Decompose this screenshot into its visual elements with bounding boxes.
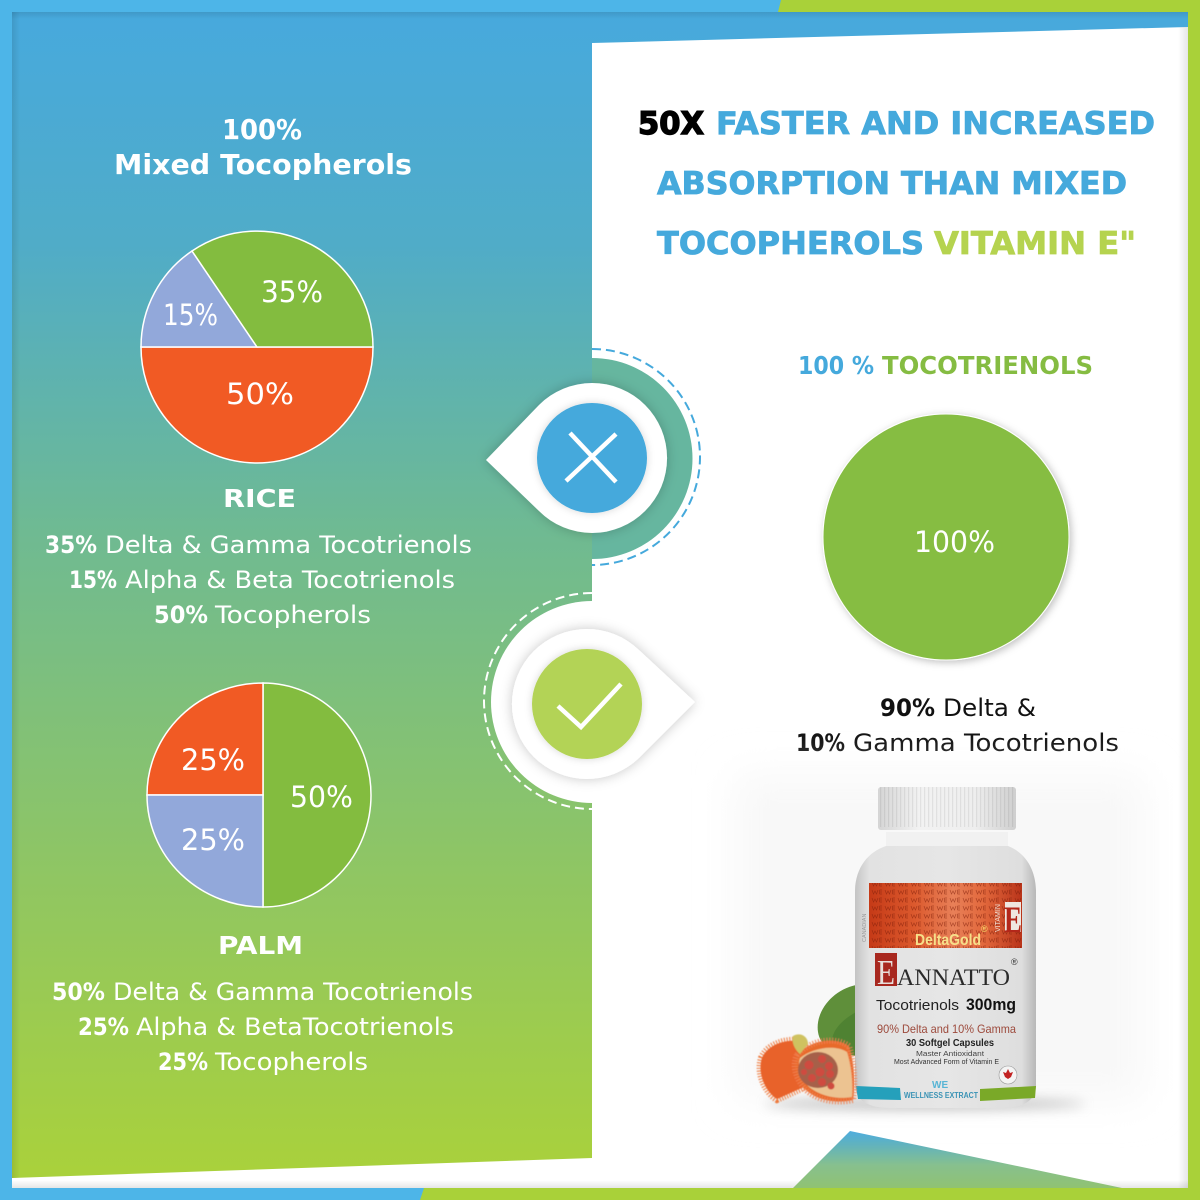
red label: DeltaGold (915, 932, 981, 949)
brand name: ANNATTO (897, 965, 1010, 990)
bottle body (855, 832, 1036, 1108)
brand name (875, 953, 1018, 992)
palm composition text: 25% (78, 1013, 129, 1041)
main heading (638, 106, 1155, 262)
tocotrienols composition text: Delta & (943, 694, 1036, 722)
rice composition text: 50% (154, 601, 208, 629)
product image: bottle with annatto fruit: 30 Softgel Capsules (906, 1038, 994, 1049)
product image: bottle with annatto fruit: Master Antioxidant (916, 1051, 984, 1058)
left title: 100% (222, 113, 302, 146)
rice composition text: 15% (69, 566, 117, 594)
rice composition text: Tocopherols (214, 601, 371, 629)
rice composition text: 35% (45, 531, 97, 559)
tocotrienols composition text (796, 694, 1119, 757)
bottom colour bands (856, 1080, 1036, 1101)
pie chart: tocotrienols 100%: 100% (914, 525, 995, 559)
main heading: 50X (638, 106, 704, 142)
pie chart: rice: 15% (163, 298, 218, 332)
red label: ® (981, 924, 988, 934)
open pod (795, 1040, 854, 1102)
product image: bottle with annatto fruit (735, 775, 1145, 1110)
bottle neck highlight (886, 832, 1008, 846)
pie chart: rice: 50% (226, 377, 294, 411)
canada seal (999, 1066, 1017, 1084)
icon: cross badge (486, 349, 700, 565)
tocotrienols composition text: 10% (796, 729, 845, 757)
palm composition text: Tocopherols (214, 1048, 368, 1076)
spiky husk (761, 1041, 808, 1099)
brand name: E (877, 953, 895, 992)
rice composition text: Alpha & Beta Tocotrienols (125, 566, 455, 594)
main heading: FASTER AND INCREASED (716, 106, 1155, 142)
subheading: 100% tocotrienols: 100 % (798, 351, 874, 380)
tocotrienols composition text: Gamma Tocotrienols (853, 729, 1119, 757)
annatto fruit (761, 1034, 854, 1102)
product image: bottle with annatto fruit: 300mg (966, 995, 1016, 1014)
palm composition text: 50% (52, 978, 105, 1006)
leaf (818, 985, 856, 1056)
red label: VITAMIN (995, 904, 1002, 932)
left title (114, 113, 412, 181)
corner triangle accent (793, 1131, 1122, 1188)
palm composition text (52, 978, 473, 1076)
stem (792, 1034, 808, 1054)
rice composition text (45, 531, 472, 629)
brand name: ® (1011, 957, 1018, 967)
pie chart: palm: 25% (181, 823, 245, 857)
pie chart: rice (141, 231, 373, 463)
pie chart: palm (147, 683, 371, 907)
red label (869, 883, 1022, 949)
main heading: ABSORPTION THAN MIXED (657, 166, 1127, 202)
main heading: VITAMIN E" (934, 226, 1136, 262)
product image: bottle with annatto fruit: 90% Delta and 10% Gamma (877, 1022, 1016, 1036)
palm composition text: Delta & Gamma Tocotrienols (113, 978, 473, 1006)
bottom colour bands: WE (932, 1080, 948, 1091)
left title: Mixed Tocopherols (114, 148, 412, 181)
palm composition text: Alpha & BetaTocotrienols (136, 1013, 454, 1041)
main heading: TOCOPHEROLS (657, 226, 924, 262)
pie chart: palm: 25% (181, 743, 245, 777)
red label: E (1004, 900, 1022, 941)
pie chart: palm: 50% (290, 780, 353, 814)
product image: bottle with annatto fruit: Tocotrienols (876, 997, 959, 1014)
rice composition text: Delta & Gamma Tocotrienols (105, 531, 472, 559)
bottle cap (878, 787, 1016, 830)
tocotrienols composition text: 90% (880, 694, 935, 722)
pie chart: tocotrienols 100% (823, 414, 1069, 660)
bottom colour bands: WELLNESS EXTRACT (904, 1091, 978, 1100)
product image: bottle with annatto fruit: Most Advanced Form of Vitamin E (894, 1059, 999, 1066)
rice heading: RICE (223, 484, 296, 513)
icon: check badge (484, 593, 695, 809)
seed cavity (798, 1052, 838, 1088)
pie chart: rice: 35% (261, 275, 323, 309)
subheading: 100% tocotrienols: TOCOTRIENOLS (882, 351, 1093, 380)
palm composition text: 25% (158, 1048, 208, 1076)
palm heading: PALM (218, 931, 303, 960)
canadian side text: CANADIAN (862, 914, 868, 942)
